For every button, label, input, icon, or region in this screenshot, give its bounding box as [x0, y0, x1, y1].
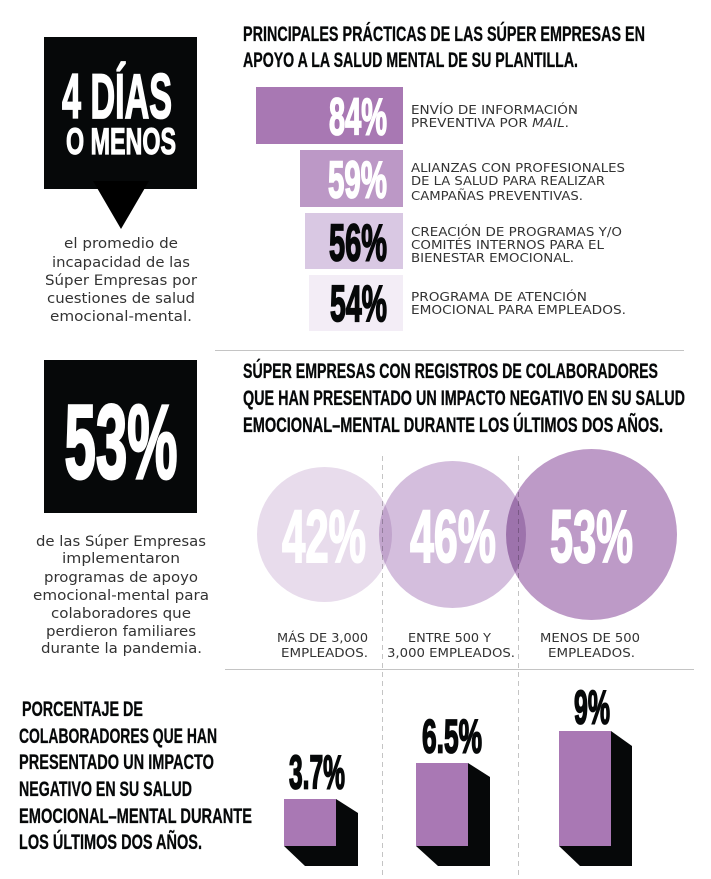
heading: porcentaje de colaboradores: PRESENTADO UN IMPACTO — [19, 750, 214, 774]
heading: porcentaje de colaboradores: PORCENTAJE DE — [22, 697, 143, 721]
bar: 54% atención: EMOCIONAL PARA EMPLEADOS. — [411, 302, 626, 317]
circle: 46% entre 500 y 3,000 empleados: ENTRE 500 Y — [408, 630, 491, 645]
circle: 53% menos de 500 empleados: MENOS DE 500 — [540, 630, 640, 645]
text block: programas de apoyo: perdieron familiares — [46, 624, 196, 640]
bar: 84% envío de información: 84% — [329, 88, 387, 146]
circle: 42% más de 3,000 empleados: 42% — [282, 495, 366, 578]
bar: 54% atención — [309, 275, 626, 332]
text block: programas de apoyo — [33, 534, 209, 657]
text block: programas de apoyo: programas de apoyo — [44, 570, 198, 586]
callout: 4 días o menos: O MENOS — [66, 121, 176, 162]
bar: 54% atención: PROGRAMA DE ATENCIÓN — [411, 289, 587, 304]
bar: 56% programas: CREACIÓN DE PROGRAMAS Y/O — [411, 224, 622, 239]
bar: 59% alianzas: ALIANZAS CON PROFESIONALES — [411, 160, 625, 175]
3d bar: 9% — [559, 680, 632, 866]
text block: programas de apoyo: implementaron — [62, 551, 180, 567]
callout: 4 días o menos: 4 DÍAS — [62, 62, 172, 132]
bar: 59% alianzas: 59% — [328, 152, 387, 210]
bar: 84% envío de información: PREVENTIVA POR MAIL. — [411, 115, 569, 130]
circle: 46% entre 500 y 3,000 empleados: 3,000 EMPLEADOS. — [387, 645, 515, 660]
bar: 59% alianzas: CAMPAÑAS PREVENTIVAS. — [411, 188, 583, 203]
3d bar: 6.5%: 6.5% — [422, 710, 482, 762]
bar: 54% atención: 54% — [330, 275, 387, 332]
callout: 53% — [44, 360, 197, 513]
text block: promedio de incapacidad — [45, 236, 197, 325]
circle: 46% entre 500 y 3,000 empleados: 46% — [410, 495, 496, 578]
heading: porcentaje de colaboradores: EMOCIONAL–MENTAL DURANTE — [19, 804, 252, 828]
bar: 56% programas: BIENESTAR EMOCIONAL. — [411, 250, 574, 265]
bar: 59% alianzas: DE LA SALUD PARA REALIZAR — [411, 173, 605, 188]
3d bar: 6.5% — [416, 710, 490, 866]
text block: programas de apoyo: durante la pandemia. — [41, 641, 202, 657]
circle: 53% menos de 500 empleados — [506, 449, 677, 660]
text block: programas de apoyo: emocional-mental para — [33, 588, 209, 604]
callout: 53%: 53% — [64, 384, 178, 501]
callout: 4 días o menos — [44, 37, 197, 229]
heading: porcentaje de colaboradores: NEGATIVO EN SU SALUD — [19, 777, 192, 801]
text block: programas de apoyo: colaboradores que — [51, 606, 191, 622]
heading: porcentaje de colaboradores — [19, 697, 252, 854]
text block: promedio de incapacidad: incapacidad de las — [52, 255, 190, 271]
heading: registros de colaboradores — [243, 358, 685, 437]
circle: 42% más de 3,000 empleados: EMPLEADOS. — [281, 645, 368, 660]
bar: 59% alianzas — [300, 150, 625, 210]
text block: promedio de incapacidad: cuestiones de salud — [47, 291, 195, 307]
bar: 84% envío de información — [256, 87, 578, 146]
bar: 84% envío de información: ENVÍO DE INFORMACIÓN — [411, 102, 578, 117]
circle: 42% más de 3,000 empleados: MÁS DE 3,000 — [277, 630, 368, 645]
circle: 42% más de 3,000 empleados — [257, 467, 392, 660]
3d bar: 9%: 9% — [574, 680, 610, 734]
bar: 56% programas: 56% — [329, 214, 387, 272]
heading: principales prácticas — [243, 21, 645, 72]
bar: 56% programas — [305, 213, 622, 272]
heading: porcentaje de colaboradores: LOS ÚLTIMOS DOS AÑOS. — [19, 829, 202, 854]
circle: 53% menos de 500 empleados: EMPLEADOS. — [548, 645, 635, 660]
bar: 56% programas: COMITÉS INTERNOS PARA EL — [411, 237, 604, 252]
text block: promedio de incapacidad: el promedio de — [64, 236, 178, 252]
text block: promedio de incapacidad: emocional-mental. — [50, 309, 192, 325]
circle: 46% entre 500 y 3,000 empleados — [379, 461, 526, 660]
3d bar: 3.7%: 3.7% — [289, 746, 345, 798]
heading: porcentaje de colaboradores: COLABORADORES QUE HAN — [19, 724, 217, 748]
3d bar: 3.7% — [284, 746, 358, 866]
circle: 53% menos de 500 empleados: 53% — [550, 495, 633, 578]
text block: programas de apoyo: de las Súper Empresas — [36, 534, 206, 550]
text block: promedio de incapacidad: Súper Empresas por — [45, 273, 197, 289]
